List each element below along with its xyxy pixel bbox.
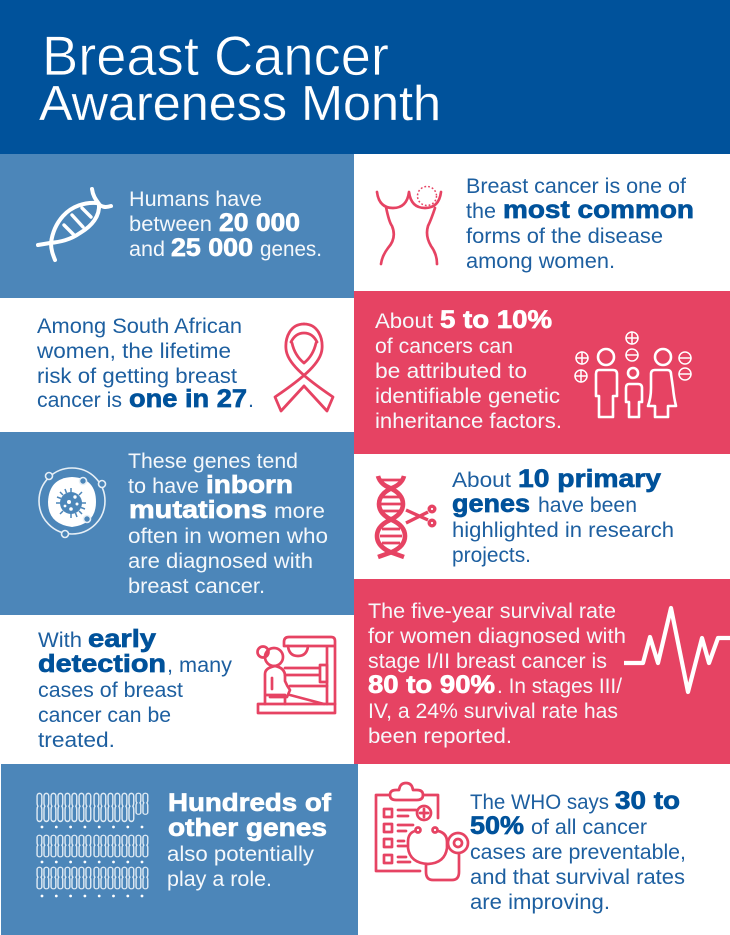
- text: primary genes: About: [452, 468, 511, 492]
- text: early detection: cancer can be: [38, 703, 171, 727]
- text: WHO preventable: cases are preventable,: [470, 840, 686, 864]
- text: genes count: between: [129, 212, 212, 236]
- text: inborn mutations: breast cancer.: [128, 574, 265, 598]
- icon: torso with breast lump: [377, 186, 441, 264]
- text: hundreds of other genes: Hundreds of: [168, 789, 332, 817]
- text: inborn mutations: [128, 449, 328, 598]
- text: most common: forms of the disease: [466, 224, 663, 248]
- text: primary genes: [452, 465, 674, 567]
- text: hundreds of other genes: play a role.: [167, 867, 272, 891]
- text: lifetime risk: Among South African: [37, 314, 242, 338]
- text: most common: Breast cancer is one of: [466, 174, 686, 198]
- panel: hundreds of other genes: [1, 764, 358, 935]
- text: early detection: treated.: [38, 728, 115, 752]
- text: survival rate: . In stages III/: [497, 674, 622, 698]
- text: genetic inheritance: identifiable genetic: [375, 384, 560, 408]
- text: survival rate: IV, a 24% survival rate has: [368, 699, 618, 723]
- title: Breast Cancer: [42, 24, 389, 87]
- text: WHO preventable: and that survival rates: [470, 865, 685, 889]
- text: genetic inheritance: be attributed to: [375, 359, 527, 383]
- text: genetic inheritance: inheritance factors.: [375, 409, 562, 433]
- text: genetic inheritance: About: [375, 309, 433, 333]
- text: survival rate: for women diagnosed with: [368, 624, 626, 648]
- panel: primary genes: [354, 454, 730, 579]
- panel: inborn mutations: [0, 432, 354, 615]
- text: WHO preventable: are improving.: [470, 890, 610, 914]
- text: genes count: Humans have: [129, 187, 262, 211]
- text: most common: among women.: [466, 249, 615, 273]
- icon: DNA strand with scissors: [377, 476, 435, 557]
- panel: most common: [354, 154, 730, 291]
- text: WHO preventable: of all cancer: [531, 815, 647, 839]
- panel: early detection: [0, 615, 354, 764]
- text: inborn mutations: mutations: [129, 496, 267, 524]
- icon: awareness ribbon: [275, 324, 333, 411]
- text: most common: [466, 174, 694, 273]
- text: survival rate: The five-year survival rate: [368, 599, 616, 623]
- text: most common: most common: [503, 196, 694, 224]
- text: inborn mutations: are diagnosed with: [128, 549, 313, 573]
- text: genetic inheritance: [375, 306, 562, 433]
- icon: family with plus and minus genes: [575, 332, 691, 417]
- text: survival rate: been reported.: [368, 724, 512, 748]
- text: lifetime risk: risk of getting breast: [37, 364, 237, 388]
- panel: genes count: [0, 154, 354, 298]
- text: inborn mutations: often in women who: [128, 524, 328, 548]
- text: genes count: and: [129, 237, 165, 261]
- icon: heartbeat pulse line: [624, 608, 730, 692]
- title: [39, 24, 441, 131]
- text: primary genes: genes: [452, 490, 530, 518]
- icon: DNA helix: [38, 189, 111, 260]
- text: primary genes: have been: [538, 493, 637, 517]
- text: early detection: early: [88, 625, 156, 653]
- text: genetic inheritance: of cancers can: [375, 334, 513, 358]
- text: hundreds of other genes: [167, 789, 332, 891]
- text: early detection: [38, 625, 232, 752]
- text: lifetime risk: [36, 314, 254, 413]
- text: WHO preventable: [470, 787, 686, 914]
- title: Awareness Month: [39, 77, 441, 131]
- text: inborn mutations: more: [274, 499, 325, 523]
- panel: survival rate: [354, 579, 730, 764]
- text: lifetime risk: women, the lifetime: [36, 339, 231, 363]
- icon: chromosome rows: [37, 793, 148, 897]
- text: primary genes: projects.: [452, 543, 531, 567]
- text: lifetime risk: cancer is: [37, 388, 122, 412]
- panel: lifetime risk: [0, 298, 354, 432]
- text: survival rate: 80 to 90%: [368, 671, 495, 699]
- text: primary genes: highlighted in research: [452, 518, 674, 542]
- icon: cell with orbit: [39, 468, 106, 538]
- text: inborn mutations: These genes tend: [128, 449, 298, 473]
- text: WHO preventable: 30 to: [615, 787, 680, 815]
- panel: genetic inheritance: [354, 291, 730, 454]
- text: survival rate: [368, 599, 626, 748]
- text: inborn mutations: inborn: [206, 471, 293, 499]
- text: lifetime risk: one in 27: [129, 385, 247, 413]
- text: survival rate: stage I/II breast cancer is: [368, 649, 607, 673]
- text: lifetime risk: .: [248, 388, 254, 412]
- text: primary genes: 10 primary: [518, 465, 661, 493]
- text: genetic inheritance: 5 to 10%: [440, 306, 552, 334]
- text: WHO preventable: The WHO says: [470, 790, 609, 814]
- icon: clipboard and stethoscope: [376, 783, 468, 880]
- header banner: [0, 0, 730, 154]
- icon: mammography machine: [258, 637, 335, 713]
- text: early detection: cases of breast: [38, 678, 183, 702]
- text: genes count: [129, 187, 322, 262]
- panel: WHO preventable: [358, 764, 730, 935]
- text: WHO preventable: 50%: [470, 812, 524, 840]
- text: inborn mutations: to have: [128, 474, 199, 498]
- text: genes count: 20 000: [219, 209, 300, 237]
- text: early detection: , many: [167, 653, 232, 677]
- text: genes count: genes.: [260, 237, 322, 261]
- text: most common: the: [466, 199, 496, 223]
- text: genes count: 25 000: [171, 234, 253, 262]
- text: early detection: detection: [38, 650, 166, 678]
- text: early detection: With: [38, 628, 82, 652]
- text: hundreds of other genes: other genes: [168, 814, 327, 842]
- text: hundreds of other genes: also potentially: [167, 842, 314, 866]
